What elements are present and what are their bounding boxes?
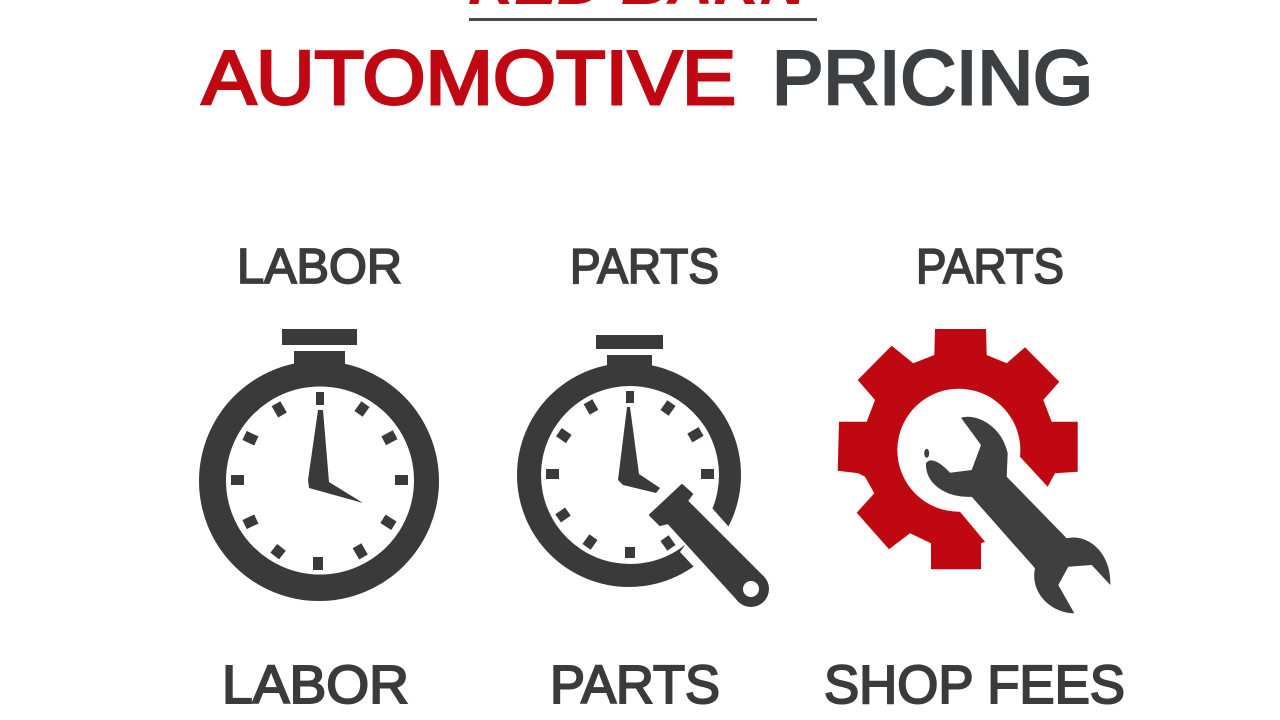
brand underline [469, 18, 817, 21]
clock hands [618, 407, 660, 493]
bottom label: shop fees: SHOP FEES [824, 655, 1125, 715]
top label: parts: PARTS [570, 240, 719, 294]
title: automotive: AUTOMOTIVE [202, 36, 736, 121]
wrench [926, 417, 1110, 613]
icon: stopwatch [199, 329, 439, 601]
icon: stopwatch with wrench [517, 335, 770, 610]
bottom label: labor: LABOR [222, 655, 409, 715]
bottom label: parts: PARTS [550, 655, 720, 715]
title: pricing: PRICING [772, 36, 1093, 121]
top label: labor: LABOR [237, 240, 402, 294]
icon: gear and wrench [838, 329, 1110, 613]
top label: parts, third column: PARTS [916, 240, 1064, 294]
wrench handle [650, 485, 763, 601]
gear [838, 329, 1078, 569]
title [202, 36, 1093, 121]
